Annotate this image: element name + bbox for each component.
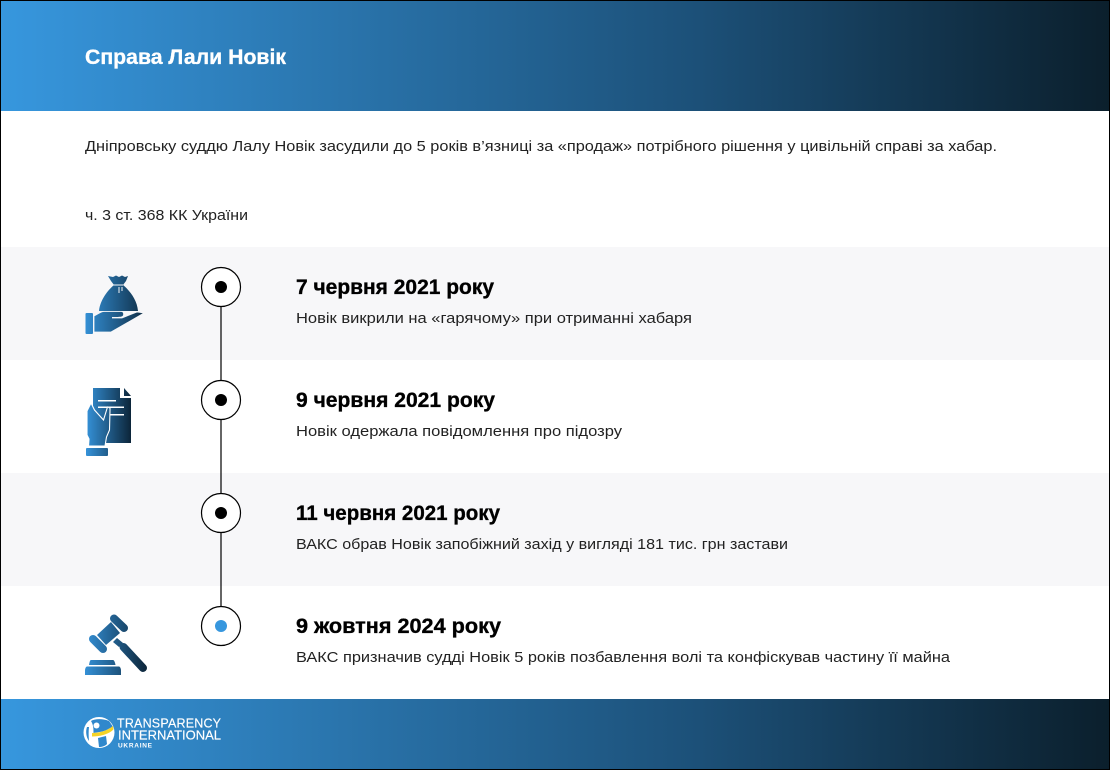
logo: Transparency International Ukraine: TRANSPARENCY <box>117 716 222 730</box>
date 3: 11 червня 2021 року <box>296 502 500 525</box>
row background 3 <box>0 473 1110 586</box>
timeline node 4 <box>202 606 240 646</box>
description 1: Новік викрили на «гарячому» при отриманні хабаря <box>296 310 692 327</box>
row background 1 <box>0 247 1110 360</box>
intro text: Дніпровську суддю Лалу Новік засудили до 5 років в’язниці за «продаж» потрібного рішення у цивільній справі за хабар. <box>85 138 997 155</box>
icon: document in hand <box>86 388 131 456</box>
description 4: ВАКС призначив судді Новік 5 років позбавлення волі та конфіскував частину її майна <box>296 649 951 666</box>
logo: Transparency International Ukraine <box>84 716 222 750</box>
title: Справа Лали Новік <box>85 46 286 69</box>
logo: Transparency International Ukraine: INTERNATIONAL <box>118 728 221 742</box>
legal article: ч. 3 ст. 368 КК України <box>85 207 248 224</box>
timeline node 2 <box>202 380 240 420</box>
date 4: 9 жовтня 2024 року <box>296 615 501 638</box>
timeline node 3 <box>202 494 240 532</box>
date 2: 9 червня 2021 року <box>296 389 495 412</box>
description 3: ВАКС обрав Новік запобіжний захід у вигляді 181 тис. грн застави <box>296 536 788 553</box>
icon: gavel <box>85 618 143 675</box>
description 2: Новік одержала повідомлення про підозру <box>296 423 623 440</box>
logo: Transparency International Ukraine: UKRAINE <box>118 742 153 750</box>
footer band <box>0 699 1110 770</box>
timeline node 1 <box>202 268 240 306</box>
icon: money bag on hand <box>86 276 144 334</box>
header band <box>0 0 1110 111</box>
date 1: 7 червня 2021 року <box>296 276 494 299</box>
timeline connector <box>220 300 222 610</box>
